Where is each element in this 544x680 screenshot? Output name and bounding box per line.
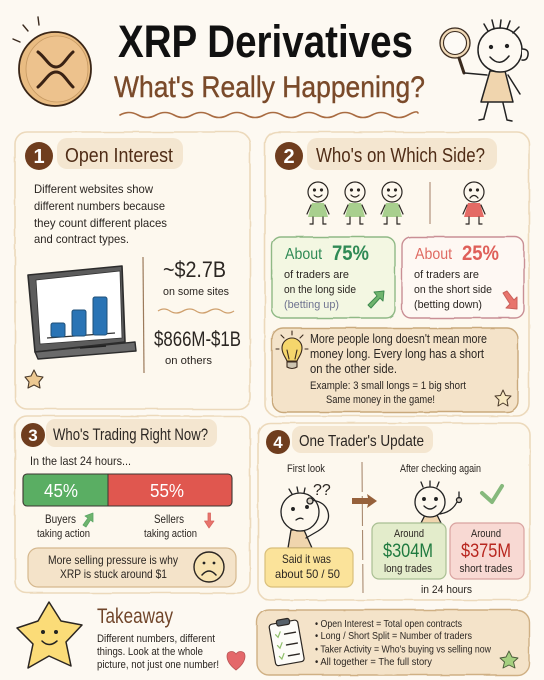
heading: Open Interest [57,138,183,169]
icon: confident trader [415,481,462,523]
card: short trades: $375M [461,541,511,562]
card: short side 25%: (betting down) [414,299,482,311]
badge: number 2: 2 [283,146,295,168]
callout: more people long: money long. Every long has a short [310,346,484,361]
text block: explanation: different numbers because [34,199,165,213]
heading: Who's on Which Side?: Who's on Which Side? [316,145,485,167]
badge: number 4: 4 [273,433,283,452]
bar chart: buyers vs sellers [23,474,232,506]
stat: about 2.7B: ~$2.7B [163,257,226,282]
card: said it was 50/50: Said it was [282,552,331,566]
arrow: down [503,291,517,309]
callout: selling pressure: XRP is stuck around $1 [60,567,167,581]
text block: summary list: • Taker Activity = Who's buying vs selling now [315,644,491,656]
panel: open interest [15,132,250,409]
callout: more people long: Example: 3 small longs = 1 big short [310,380,466,392]
callout: selling pressure [28,548,236,587]
heading: Who's Trading Right Now?: Who's Trading Right Now? [53,425,208,444]
badge: number 3: 3 [28,426,38,445]
heading: takeaway: Takeaway [97,605,173,628]
text block: takeaway: Different numbers, different [97,633,215,645]
divider [143,257,144,373]
icon: check mark [482,486,502,502]
arrow: up [368,291,384,308]
panel: one trader's update [258,423,530,600]
text block: explanation: Different websites show [34,182,153,196]
heading: One Trader's Update: One Trader's Update [299,433,424,450]
wavy underline [120,112,418,118]
icon: confused trader [281,482,331,548]
icon: light bulb [276,331,308,368]
text block: summary list: • Long / Short Split = Number of traders [315,630,472,642]
stat: 866M to 1B: $866M-$1B [154,328,241,351]
card: short side 25%: of traders are [414,269,479,281]
bar chart: buyers vs sellers: 45% [44,481,78,501]
text: in the last 24 hours: In the last 24 hours... [30,454,131,468]
icon: long trader 2 [344,182,366,224]
label: in 24 hours: in 24 hours [421,584,472,596]
card: short side 25%: 25% [462,242,499,265]
divider [362,462,363,593]
icon: character with magnifying glass [440,20,528,121]
label: sellers: taking action [144,528,197,540]
card: short trades [450,523,524,579]
label: buyers: taking action [37,528,90,540]
badge: number 1: 1 [33,146,45,168]
arrow: to second look [352,494,377,508]
card: long side 75%: 75% [332,242,369,265]
bar chart: buyers vs sellers: 55% [150,481,184,501]
text block: summary list: • All together = The full story [315,656,433,668]
callout: more people long: Same money in the game! [326,394,435,406]
badge: number 1 [25,142,53,170]
panel: who's trading right now [15,416,250,593]
icon: heart [227,652,245,670]
text block: summary list: • Open Interest = Total open contracts [315,618,462,630]
card: long side 75%: (betting up) [284,299,339,311]
card: short trades: short trades [460,563,513,575]
text block: summary list [315,618,491,668]
badge: number 2 [275,142,303,170]
label: first look: First look [287,463,325,475]
label: after checking again: After checking again [400,463,481,475]
label: sellers: Sellers [154,512,184,526]
icon: long trader 3 [381,182,403,224]
icon: laptop with bar chart [28,266,136,359]
stat: about 2.7B [163,257,229,298]
text block: explanation [34,182,167,246]
badge: number 4 [266,430,290,454]
panel: who's on which side [265,132,529,416]
stat: 866M to 1B: on others [165,355,213,367]
label: sellers [144,512,214,540]
wavy separator [158,309,234,313]
stat: 866M to 1B [154,328,241,367]
card: short side 25%: on the short side [414,284,492,296]
label: buyers: Buyers [45,512,76,526]
title: XRP Derivatives [118,16,413,67]
icon: XRP coin [13,17,91,106]
subtitle: What's Really Happening? [114,71,425,104]
text block: explanation: and contract types. [34,232,129,246]
icon: green star [500,651,518,668]
card: short trades: Around [471,528,501,540]
text block: explanation: they count different places [34,216,167,230]
text block: takeaway: things. Look at the whole [97,646,203,658]
icon: clipboard [268,617,305,666]
card: long side 75%: on the long side [284,284,356,296]
callout: more people long: More people long doesn't mean more [310,331,487,346]
card: long side 75%: About [285,246,322,263]
card: long trades: long trades [384,563,432,575]
card: long side 75%: of traders are [284,269,349,281]
label: buyers [37,512,93,540]
icon: smiling star [17,602,82,668]
panel: summary [257,610,529,675]
card: long trades: $304M [383,541,433,562]
card: said it was 50/50 [265,548,353,587]
icon: long trader 1 [307,182,329,224]
callout: more people long: on the other side. [310,361,397,376]
icon: star [25,370,43,388]
icon: sad face [194,552,224,582]
heading: One Trader's Update [292,426,433,453]
heading: Who's on Which Side? [307,138,497,170]
text block: takeaway [97,633,219,671]
text block: takeaway: picture, not just one number! [97,659,219,671]
card: said it was 50/50: about 50 / 50 [275,567,340,581]
icon: confused trader: ?? [313,482,331,499]
card: long trades [372,523,446,579]
callout: more people long [272,328,518,412]
card: short side 25%: About [415,246,452,263]
callout: selling pressure: More selling pressure is why [48,553,178,567]
heading: Open Interest: Open Interest [65,145,173,167]
badge: number 3 [21,423,45,447]
heading: Who's Trading Right Now? [46,419,217,447]
card: long side 75% [272,237,395,318]
icon: short trader [463,182,485,224]
card: short side 25% [402,237,524,318]
icon: star outline [495,390,511,406]
divider [429,182,431,224]
stat: about 2.7B: on some sites [163,286,229,298]
card: long trades: Around [394,528,424,540]
